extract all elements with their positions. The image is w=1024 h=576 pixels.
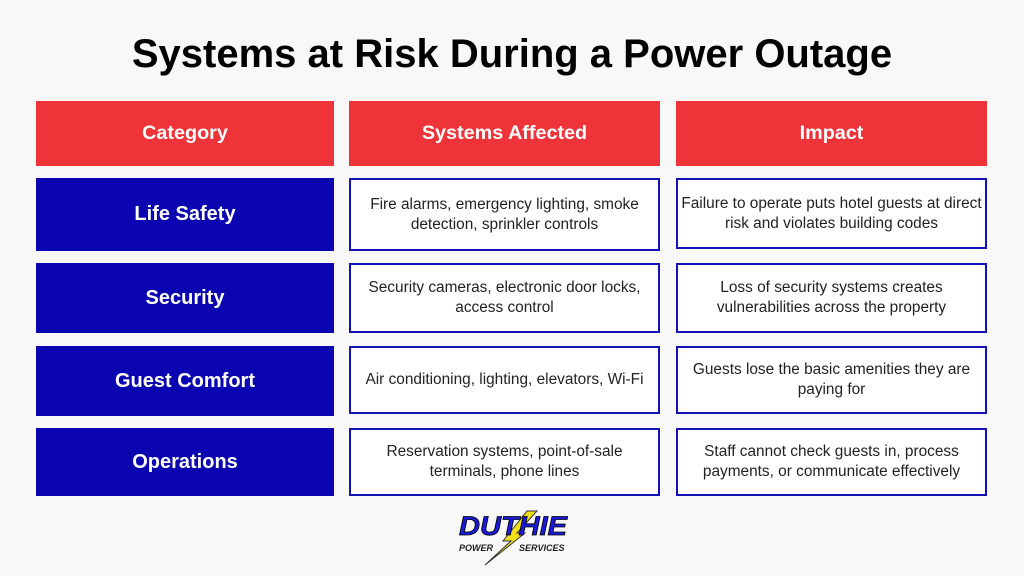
cell: Reservation systems, point-of-sale: [386, 443, 623, 460]
icon: lightning bolt: [485, 511, 537, 565]
header: systems affected: Systems Affected: [422, 122, 587, 144]
row: security: Security: [146, 286, 224, 308]
cell: Staff cannot check guests in, process: [704, 443, 959, 460]
row: life safety: [36, 178, 334, 251]
cell: [676, 178, 987, 249]
logo: SERVICES: [519, 543, 565, 553]
cell: [676, 346, 987, 414]
logo: [459, 510, 568, 566]
row: operations: Operations: [132, 450, 238, 472]
cell: payments, or communicate effectively: [703, 463, 960, 480]
header: impact: Impact: [800, 122, 863, 144]
cell: Guests lose the basic amenities they are: [693, 361, 970, 378]
logo: POWER: [459, 543, 494, 553]
cell: [349, 178, 660, 251]
row: operations: [36, 428, 334, 496]
row: guest comfort: [36, 346, 334, 416]
title: Systems at Risk During a Power Outage: [132, 32, 892, 76]
cell: [676, 428, 987, 496]
row: guest comfort: Guest Comfort: [115, 370, 255, 392]
cell: risk and violates building codes: [725, 214, 938, 232]
cell: access control: [455, 299, 554, 316]
cell: Air conditioning, lighting, elevators, Wi-Fi: [365, 371, 644, 388]
cell: paying for: [798, 381, 865, 398]
cell: Security cameras, electronic door locks,: [368, 279, 640, 296]
logo: DUTHIE: [459, 511, 568, 541]
header: category: Category: [142, 122, 228, 144]
cell: terminals, phone lines: [430, 463, 579, 480]
cell: Failure to operate puts hotel guests at direct: [681, 194, 982, 212]
header: category: [36, 101, 334, 166]
cell: Loss of security systems creates: [720, 279, 943, 296]
header: impact: [676, 101, 987, 166]
row: life safety: Life Safety: [134, 203, 236, 225]
cell: [676, 263, 987, 333]
cell: detection, sprinkler controls: [411, 216, 598, 232]
cell: [349, 263, 660, 333]
cell: vulnerabilities across the property: [717, 299, 946, 316]
cell: [349, 346, 660, 414]
row: security: [36, 263, 334, 333]
cell: Fire alarms, emergency lighting, smoke: [370, 196, 639, 212]
cell: [349, 428, 660, 496]
header: systems affected: [349, 101, 660, 166]
